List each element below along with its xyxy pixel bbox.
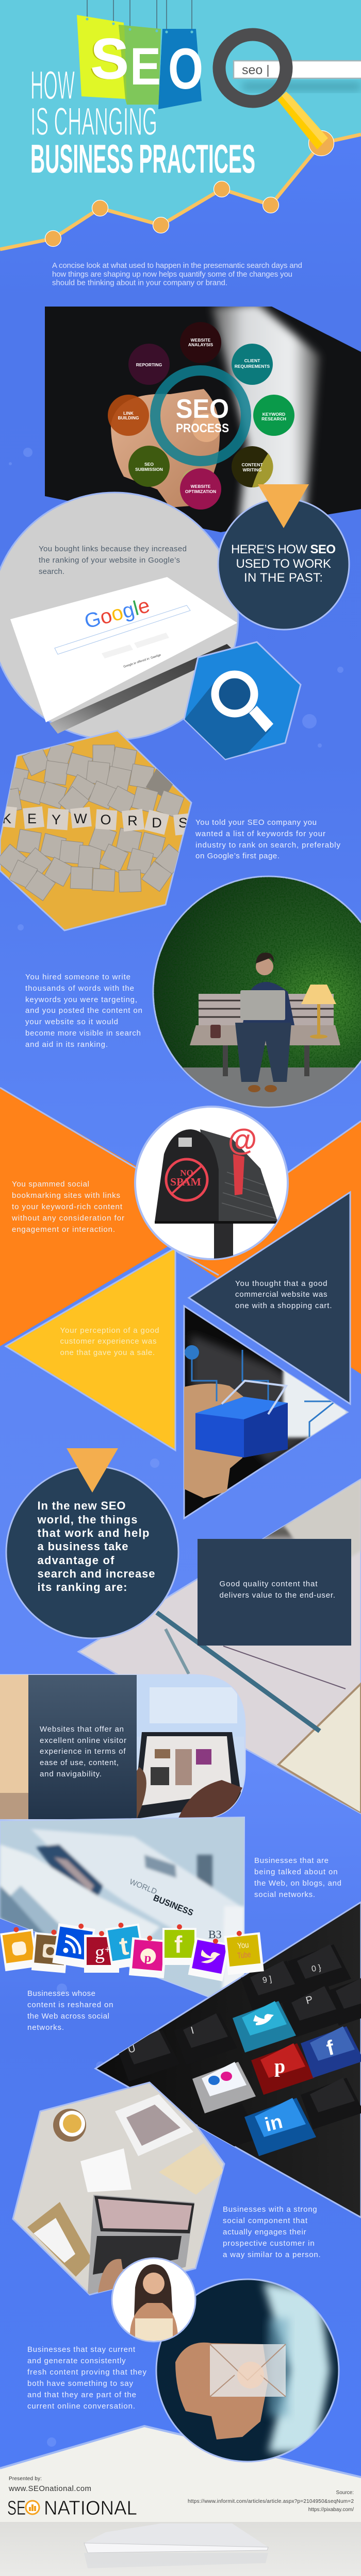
Google page card [10,577,237,734]
text: bought links: search. [39,567,64,576]
presented by block: Presented by: [9,2476,42,2482]
panel: yellow triangle [6,1248,175,1450]
heading text: world, the things [37,1513,137,1526]
keyword letter tiles: E [27,811,37,826]
man [235,953,294,1092]
red @ flag: @ [228,1123,257,1157]
polaroid: twitter [188,1935,230,1981]
heading text: USED TO WORK [236,557,331,571]
text: customer experience: Your perception of a good [60,1326,159,1335]
text: bought links: You bought links because they increased [39,545,187,553]
process bubble: website analysis: WEBSITE [191,337,211,343]
panel: shopping cart text triangle [189,1192,350,1404]
keyword letter tiles: O [100,812,111,827]
text: bought links: the ranking of your website in Google’s [39,556,180,565]
keyword letter tiles: Y [52,812,61,827]
polaroid: facebook: f [174,1931,183,1958]
text: thousands of words [25,973,142,1049]
text: spammed bookmarking: You spammed social [12,1180,89,1189]
key: linkedin [244,2098,316,2156]
text: spammed bookmarking: to your keyword-rich content [12,1202,123,1211]
process bubble: reporting [128,344,170,385]
text: social component: a way similar to a person. [223,2250,321,2259]
process bubble: client requirements [232,344,273,385]
process bubble: SEO submission: SEO [144,462,154,467]
hanging SEO tags: S [91,27,128,91]
text: spammed bookmarking: without any consideration for [11,1214,124,1223]
text: visitor experience: ease of use, content, [40,1758,119,1767]
polaroid: google plus: g [95,1942,105,1963]
process bubble: link building [108,395,149,436]
text: thousands of words: You hired someone to write [25,973,130,981]
text: visitor experience: excellent online visitor [40,1736,126,1745]
text: being talked about [254,1856,341,1899]
photo circle: man on bench [153,876,361,1107]
keyword letter tiles: K [2,811,11,826]
text: shopping cart: commercial website was [235,1290,327,1299]
SEO National logo [7,2497,137,2519]
bench [190,994,340,1076]
heading text: IN THE PAST: [244,571,323,585]
photo: newspapers [0,1817,244,2008]
process bubble: website analysis [180,322,221,363]
text: stay current: and generate consistently [27,2357,126,2365]
process bubble: keyword research: RESEARCH [261,416,286,421]
text: keyword list: on Google’s first page. [195,852,280,860]
polaroid: youtube: Tube [237,1951,251,1960]
hanging SEO tags: O [168,37,203,101]
red @ flag [229,1128,255,1195]
process bubble: content writing: WRITING [243,467,262,472]
SEO process label: SEO [176,394,229,424]
text: social component: actually engages their [223,2228,306,2236]
header: teal sky above the growth chart [0,0,361,249]
text: reshared content: networks. [27,2023,64,2032]
heading circle: new SEO world [6,1448,178,1638]
tablet device [133,1732,242,1819]
text: being talked about: social networks. [254,1890,315,1899]
polaroid: blogger [0,1925,38,1971]
text: thousands of words: and you posted the content on [25,1006,142,1015]
circuit lines [192,1350,335,1443]
polaroid: google plus: + [105,1944,110,1955]
text: thousands of words: become more visible in search [25,1029,141,1038]
text: being talked about: the Web, on blogs, and [254,1879,341,1888]
text: bought links [39,545,187,576]
SEO process label [176,399,229,432]
photo: newspapers: B3 [208,1928,222,1941]
heading text: that work and help [37,1527,150,1539]
heading text: a business take [37,1540,128,1553]
keyword letter tiles: R [127,813,138,828]
presented by block: www.SEOnational.com [8,2484,91,2493]
intro text: how things are shaping up now helps quantify some of the changes you [52,270,292,279]
polaroid: youtube: You [237,1941,249,1951]
photo: newspapers: WORLD [128,1877,158,1896]
text: stay current [27,2345,146,2411]
heading text: In the new SEO [37,1499,126,1512]
lamp [301,985,336,1039]
growth chart line with dots [0,131,361,249]
photo: keyboard with social keys: 9 ] [262,1975,272,1985]
panel: light edges of orange shape [0,1088,361,1275]
heading text: HERE’S HOW SEO [231,543,336,556]
text: thousands of words: thousands of words with the [25,984,134,993]
no spam sign [166,1159,207,1200]
text: social component: Businesses with a strong [223,2205,317,2214]
SEO process label: PROCESS [176,421,229,435]
text: stay current: both have something to say [27,2379,133,2388]
orange pointer triangle [258,484,309,528]
photo: keyboard with social keys [95,1902,361,2217]
basket [195,1397,288,1458]
key: facebook [301,2026,361,2078]
source links: Source: [336,2490,354,2496]
process bubble: website optimization [180,468,221,510]
key: linkedin: in [262,2111,285,2136]
process bubble: link building: LINK [123,411,134,416]
photo: desk with laptop and parcels [13,2082,224,2295]
text: spammed bookmarking [11,1180,124,1234]
text: reshared content: Businesses whose [27,1989,95,1998]
hanging SEO tags: E [130,37,161,96]
process bubble: SEO submission: SUBMISSION [135,467,163,472]
text: spammed bookmarking: bookmarking sites with links [12,1191,120,1200]
coffee cup [210,1025,221,1038]
process bubble: keyword research [253,395,294,436]
hanging SEO tags: S [89,28,127,91]
panel: good quality content: Good quality content that [220,1580,318,1588]
text: keyword list [195,818,340,860]
heading text: its ranking are: [37,1581,127,1594]
polaroid: instagram [31,1928,69,1973]
process bubble: website optimization: OPTIMIZATION [185,489,216,494]
laptop illustration [84,2523,268,2568]
polaroid: facebook [162,1924,196,1965]
polaroid: pinterest [129,1934,168,1978]
title heading: IS CHANGING [30,100,157,144]
process bubble: content writing: CONTENT [241,462,263,467]
process bubble: client requirements: REQUIREMENTS [235,364,270,369]
text: shopping cart: You thought that a good [235,1279,327,1288]
panel: good quality content: delivers value to the end-user. [220,1591,335,1600]
polaroid: youtube [223,1929,264,1975]
polaroid: google plus [84,1931,119,1973]
polaroid: rss [52,1920,96,1969]
keyword letter tiles: D [152,815,162,831]
process bubble: SEO submission [128,446,170,487]
text: stay current: current online conversation. [27,2402,135,2411]
process bubble: reporting: REPORTING [136,362,162,367]
hanging SEO tags [77,0,203,109]
photo: scrabble keywords [0,731,193,930]
SEO National logo: SE [7,2497,26,2519]
title heading: HOW [30,62,75,108]
panel: good quality content [198,1539,351,1646]
process bubble: website optimization: WEBSITE [191,484,211,489]
key: pinterest: p [274,2056,285,2077]
text: reshared content: the Web across social [27,2012,109,2021]
photo: newspapers: BUSINESS [152,1893,195,1918]
orange pointer triangle [67,1448,118,1493]
text: customer experience [60,1326,159,1357]
black keys [117,1944,361,2155]
process bubble: link building: BUILDING [118,415,139,420]
footer panel [0,2426,361,2576]
photo triangle: hand with shopping basket [184,1306,351,1518]
key: flickr [192,2062,256,2113]
text: social component: prospective customer in [223,2239,315,2248]
source links: https://pixabay.com/ [308,2507,354,2513]
text: keyword list: You told your SEO company you [195,818,317,827]
SEO National logo: NATIONAL [44,2497,137,2519]
text: thousands of words: keywords you were targeting, [25,995,137,1004]
key: facebook: f [324,2036,337,2060]
photo: notebook with pencils [78,1479,361,1814]
heading text: advantage of [37,1554,114,1567]
text: social component: social component that [223,2216,308,2225]
Google page card: Google [82,594,152,633]
polaroid: pinterest: p [144,1951,152,1965]
text: visitor experience: and navigability. [40,1770,102,1778]
text: keyword list: wanted a list of keywords for your [195,829,325,838]
text: being talked about: being talked about on [254,1868,338,1876]
text: customer experience: one that gave you a sale. [60,1348,155,1357]
key: twitter [233,2001,296,2053]
presented by block [8,2476,91,2493]
photo: keyboard with social keys: U [127,2043,137,2056]
photo: SEO process hand [45,304,361,536]
panel: bought links circle [0,493,238,740]
text: being talked about: Businesses that are [254,1856,329,1865]
process bubble: keyword research: KEYWORD [262,412,285,417]
keyword letter tiles [0,805,193,836]
process bubble: content writing [232,446,273,487]
heading circle: how SEO used to work [218,484,349,630]
heading text: search and increase [37,1567,155,1580]
text: visitor experience [40,1725,126,1778]
intro text: should be thinking about in your company or brand. [52,278,227,287]
text: stay current: and that they are part of the [27,2391,136,2399]
photo circle: girl with shopping bag [112,2258,195,2342]
text: thousands of words: your website so it would [25,1018,118,1026]
text: stay current: fresh content proving that they [27,2368,146,2377]
text: shopping cart [235,1279,332,1310]
key: pinterest [251,2043,315,2095]
social media polaroids [0,1920,264,1981]
keyword letter tiles: W [74,811,87,826]
polaroid: tumblr [105,1920,145,1970]
magnifying glass over search bar [219,35,361,149]
title heading [30,62,255,181]
process bubble: client requirements: CLIENT [244,358,260,363]
process bubble: website analysis: ANALAYSIS [188,342,213,347]
text: keyword list: industry to rank on search, preferably [195,841,340,850]
keyword letter tiles: S [178,815,188,831]
text: spammed bookmarking: engagement or interaction. [12,1225,115,1234]
icon: search hexagon [184,642,301,759]
photo panel: tablet browsing [0,1675,248,1819]
text: stay current: Businesses that stay current [27,2345,136,2354]
text: social component [223,2205,321,2259]
text: reshared content: content is reshared on [27,2001,113,2009]
photo: keyboard with social keys: 0 } [311,1963,322,1974]
intro text [52,261,302,287]
photo: keyboard with social keys: I [190,2025,195,2037]
photo: keyboard with social keys: P [305,1994,314,2007]
polaroid: tumblr: t [118,1931,130,1961]
source links [188,2490,354,2513]
intro text: A concise look at what used to happen in the presemantic search days and [52,261,302,270]
no spam sign: NO [180,1168,193,1178]
panel: orange background [0,1088,361,1374]
text: thousands of words: and aid in its ranking. [25,1040,108,1049]
text: visitor experience: Websites that offer an [40,1725,124,1734]
source links: https://www.informit.com/articles/article.aspx?p=2104950&seqNum=2 [188,2499,354,2504]
no spam sign: SPAM [170,1176,201,1188]
text: reshared content [27,1989,113,2032]
text: shopping cart: one with a shopping cart. [235,1301,332,1310]
text: customer experience: customer experience was [60,1337,157,1346]
heading text [231,543,336,585]
heading text [37,1499,155,1594]
Google page card: Google.ie offered in: Gaeilge [123,653,162,669]
magnifying glass over search bar: seo | [242,63,270,77]
text: visitor experience: experience in terms of [40,1747,126,1756]
photo circle: hand pressing envelope [156,2279,339,2462]
background bokeh [9,448,343,2447]
photo circle: no spam mailbox [135,1107,288,1260]
